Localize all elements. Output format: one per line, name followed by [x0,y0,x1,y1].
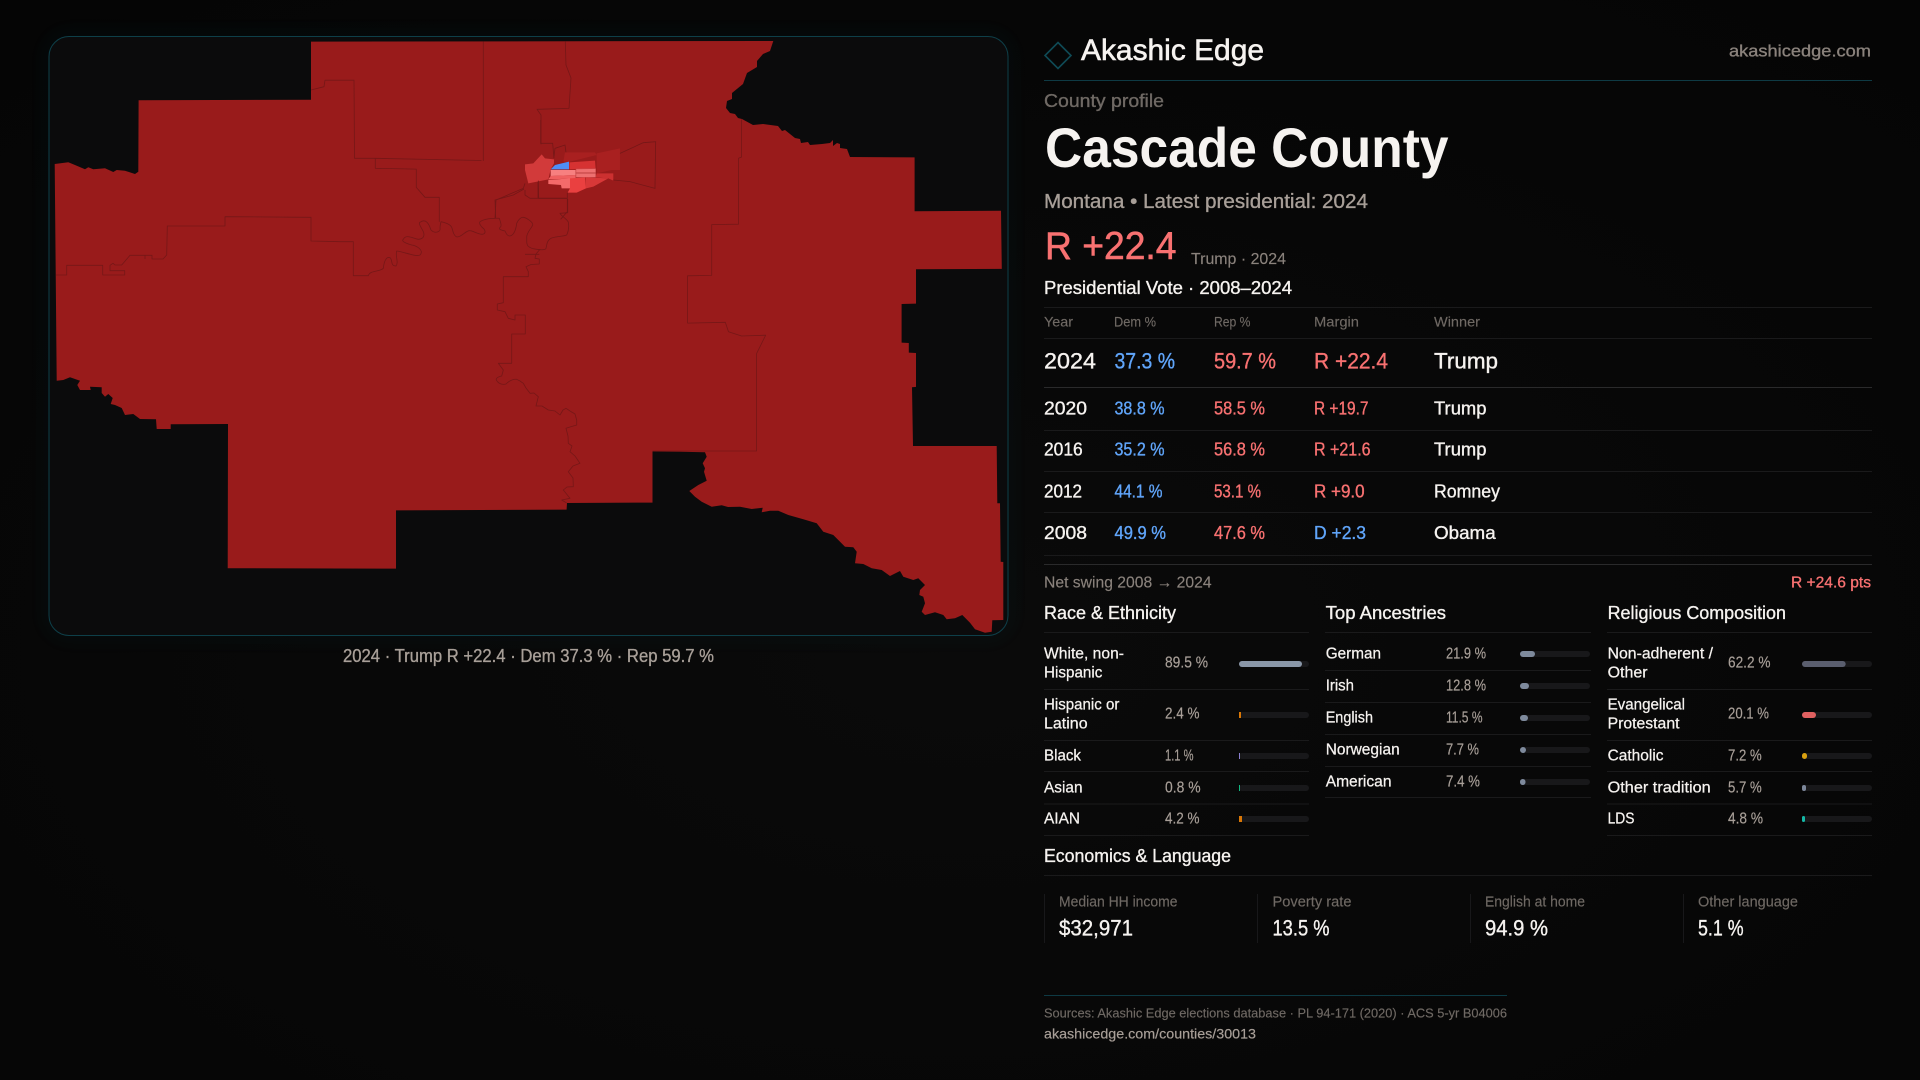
row: irish: Irish [1326,677,1354,694]
eyebrow: County profile [1044,91,1164,111]
heading: economics: Economics & Language [1044,846,1231,866]
row: hispanic [1044,696,1309,732]
row 2024: R +22.4 [1314,349,1388,374]
net swing row: Net swing 2008 → 2024 [1044,574,1212,591]
row: aian [1044,810,1309,827]
row: american: 7.4 % [1446,773,1480,790]
panel: race and ethnicity [1044,603,1309,836]
table header row: Dem % [1114,314,1156,330]
row: catholic: Catholic [1608,747,1664,764]
row: american: American [1326,773,1392,790]
headline margin: R +22.4 [1045,225,1176,268]
row: german: German [1326,645,1381,662]
map caption: 2024 · Trump R +22.4 · Dem 37.3 % · Rep 59.7 % [343,646,714,666]
kpi: english at home [1470,894,1585,943]
map: urban precincts [495,120,656,219]
header bar [1044,34,1872,80]
row: lds [1608,810,1872,827]
kpi: poverty [1258,894,1352,943]
row 2012: 53.1 % [1214,481,1261,501]
row 2024: 59.7 % [1214,349,1276,374]
row 2008: 47.6 % [1214,523,1265,543]
sources: Sources: Akashic Edge elections database · PL 94-171 (2020) · ACS 5-yr B04006 [1044,1005,1507,1020]
row 2016: Trump [1434,440,1486,460]
row: non-adherent: Other [1608,664,1648,681]
row: black: Black [1044,747,1081,764]
row: german: 21.9 % [1446,645,1486,662]
row: lds: LDS [1608,810,1634,827]
row: hispanic: Hispanic or [1044,696,1119,713]
row: catholic: 7.2 % [1728,747,1762,764]
kpi: poverty: 13.5 % [1272,916,1330,941]
row: lds: 4.8 % [1728,810,1763,827]
row 2016: 2016 [1044,440,1083,460]
row 2024: 2024 [1044,349,1096,374]
row: aian: 4.2 % [1165,810,1200,827]
kpi: other language [1684,894,1798,943]
table header row: Margin [1314,314,1359,330]
row: asian: Asian [1044,779,1083,796]
row 2020 [1044,399,1486,419]
row: hispanic: 2.4 % [1165,706,1200,723]
row: german [1326,645,1590,662]
row: irish [1326,677,1590,694]
row: asian: 0.8 % [1165,779,1201,796]
net swing row [1044,564,1872,591]
heading: ancestries: Top Ancestries [1326,603,1446,623]
row 2008 [1044,523,1497,543]
net swing row: R +24.6 pts [1791,574,1871,591]
kpi: poverty: Poverty rate [1272,895,1352,911]
row: norwegian: Norwegian [1326,741,1400,758]
kpi: english at home: English at home [1485,895,1585,911]
row: white [1044,645,1309,681]
row 2016: 35.2 % [1114,440,1164,460]
row: white: White, non- [1044,645,1124,662]
panel: county map [49,36,1008,636]
table header row: Winner [1434,314,1480,330]
row 2008: D +2.3 [1314,523,1366,543]
row 2020: 38.8 % [1114,399,1164,419]
row 2016 [1044,440,1486,460]
row: black: 1.1 % [1165,747,1194,764]
site url: akashicedge.com [1729,42,1871,60]
row: norwegian [1326,741,1590,758]
row 2012 [1044,481,1500,501]
icon: brand diamond [1045,42,1071,68]
kpi: other language: Other language [1698,895,1798,911]
row 2020: 2020 [1044,399,1087,419]
headline margin: Trump · 2024 [1191,251,1286,268]
row: asian [1044,779,1309,796]
row 2008: 49.9 % [1114,523,1166,543]
table header row [1044,314,1480,330]
row: aian: AIAN [1044,810,1080,827]
subtitle: Montana • Latest presidential: 2024 [1044,191,1368,213]
row: english: English [1326,709,1373,726]
row: other tradition: 5.7 % [1728,779,1762,796]
kpi: english at home: 94.9 % [1485,916,1548,941]
kpi: income: Median HH income [1059,895,1178,911]
panel: top ancestries [1325,603,1591,798]
row 2008: Obama [1434,523,1497,543]
row: american [1326,773,1590,790]
row: evangelical [1608,696,1872,732]
row 2012: Romney [1434,481,1500,501]
row: non-adherent [1608,645,1872,681]
row 2020: R +19.7 [1314,399,1368,419]
kpi: other language: 5.1 % [1698,916,1744,941]
footer [1044,996,1507,1041]
row: hispanic: Latino [1044,715,1088,732]
row 2016: R +21.6 [1314,440,1371,460]
table heading: Presidential Vote · 2008–2024 [1044,278,1292,298]
row 2012: R +9.0 [1314,481,1365,501]
row 2016: 56.8 % [1214,440,1265,460]
row 2024 [1044,349,1498,374]
row: other tradition [1608,779,1872,796]
heading: religion: Religious Composition [1608,603,1786,623]
row 2020: Trump [1434,399,1486,419]
row: catholic [1608,747,1872,764]
table header row: Rep % [1214,314,1250,330]
brand name: Akashic Edge [1081,34,1264,67]
row: norwegian: 7.7 % [1446,741,1479,758]
table header row: Year [1044,314,1073,330]
row: other tradition: Other tradition [1608,779,1711,796]
row: evangelical: 20.1 % [1728,706,1769,723]
row: evangelical: Evangelical [1608,696,1685,713]
row 2020: 58.5 % [1214,399,1265,419]
heading: race: Race & Ethnicity [1044,603,1176,623]
kpi: income [1044,894,1178,943]
row: white: 89.5 % [1165,654,1208,671]
row: evangelical: Protestant [1608,715,1680,732]
row: black [1044,747,1309,764]
row 2012: 44.1 % [1114,481,1162,501]
row: english: 11.5 % [1446,709,1483,726]
row: english [1326,709,1590,726]
headline margin [1045,225,1286,268]
kpi: income: $32,971 [1059,916,1133,941]
row: non-adherent: Non-adherent / [1608,645,1714,662]
row 2024: 37.3 % [1114,349,1175,374]
row 2012: 2012 [1044,481,1082,501]
table: presidential vote [1044,278,1872,556]
row: irish: 12.8 % [1446,677,1486,694]
row 2024: Trump [1434,349,1498,374]
row: non-adherent: 62.2 % [1728,654,1771,671]
map: county precinct shapes [55,41,1003,633]
panel: religious composition [1607,603,1872,836]
row 2008: 2008 [1044,523,1087,543]
county url: akashicedge.com/counties/30013 [1044,1025,1256,1041]
panel: economics and language [1044,846,1872,943]
row: white: Hispanic [1044,664,1103,681]
title: Cascade County [1045,116,1448,179]
